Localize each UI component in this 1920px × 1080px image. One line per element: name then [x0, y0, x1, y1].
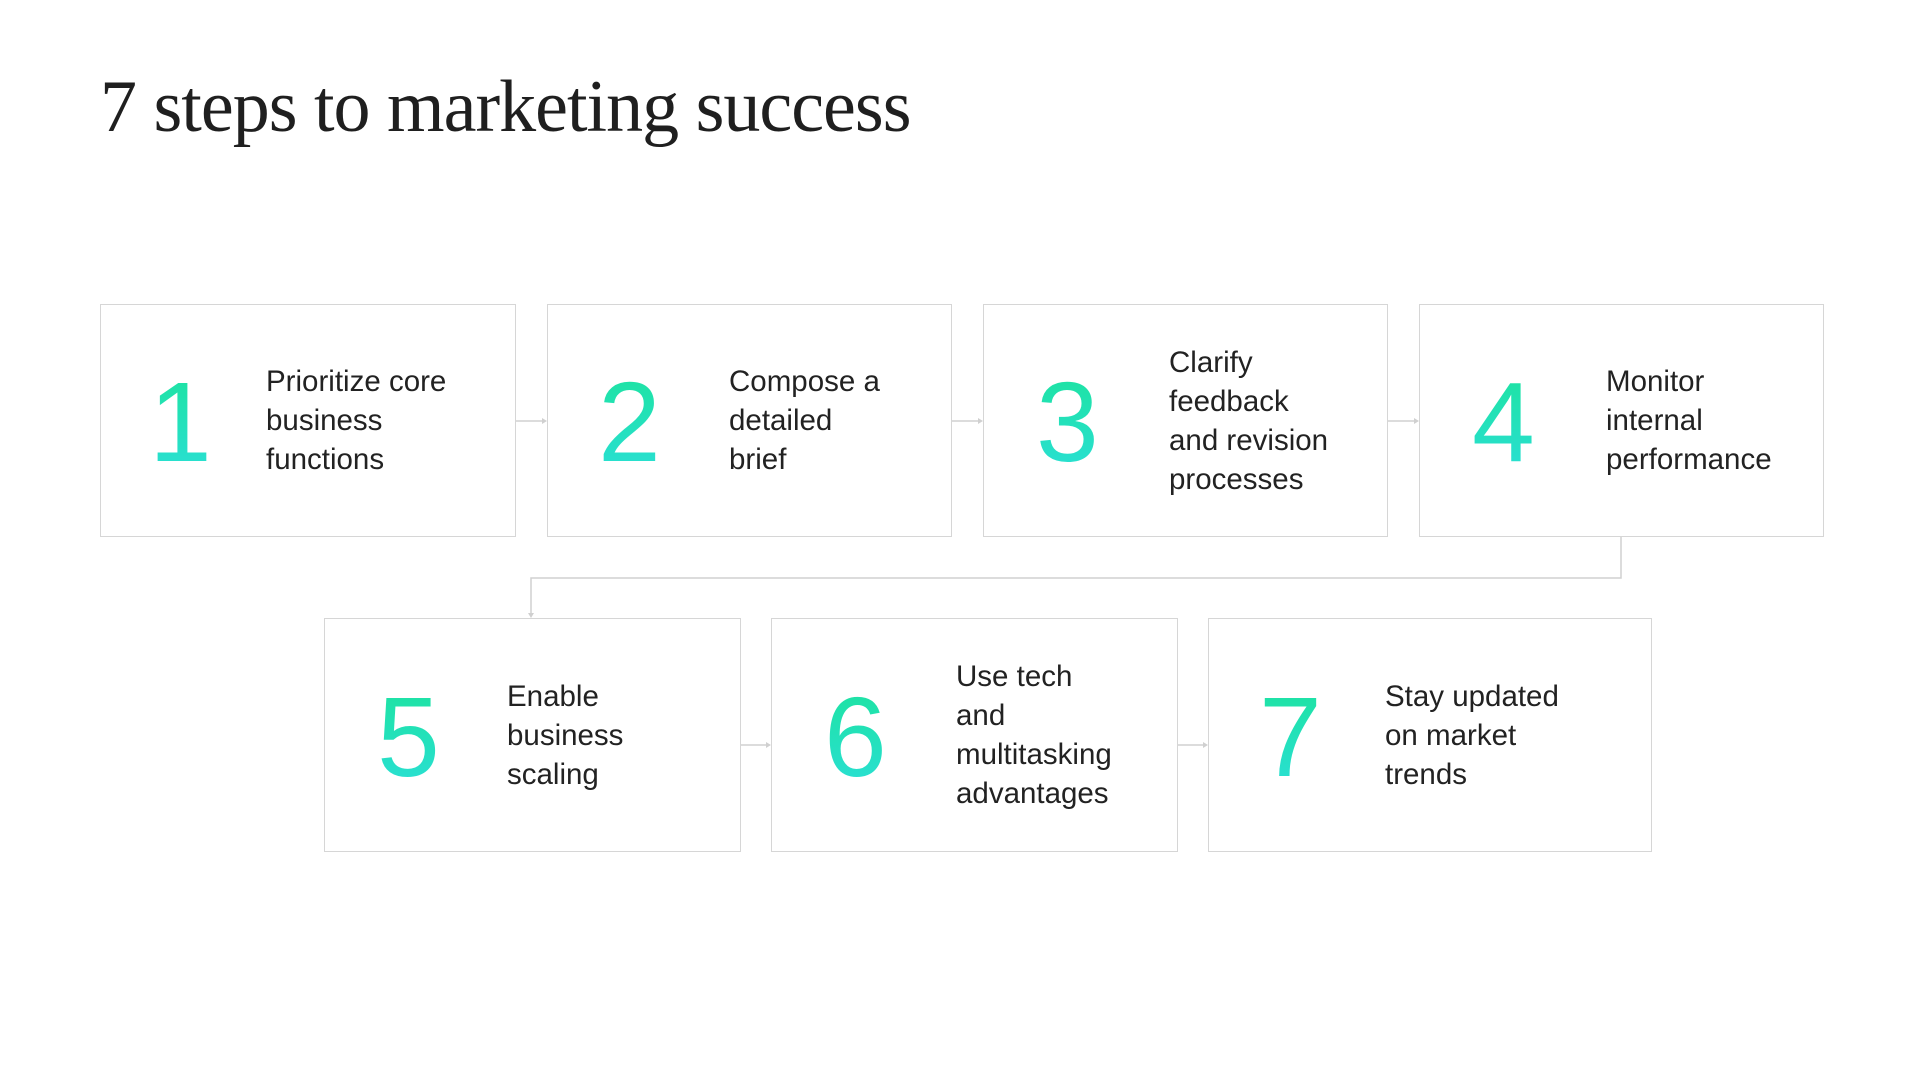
panel: step 3: processes — [1169, 462, 1303, 496]
panel: step 6: and — [956, 699, 1005, 732]
panel: step 1 — [100, 304, 516, 537]
panel: step 4: performance — [1606, 443, 1772, 476]
panel: step 2: Compose a — [729, 365, 880, 398]
panel: step 1: business — [266, 404, 382, 437]
panel: step 1: functions — [266, 443, 384, 476]
panel: step 6: advantages — [956, 777, 1109, 810]
panel: step 4: Monitor — [1606, 365, 1704, 398]
panel: step 7: trends — [1385, 758, 1467, 790]
panel: step 3: and revision — [1169, 424, 1328, 456]
panel: step 4: 4 — [1472, 359, 1535, 485]
panel: step 3: 3 — [1036, 359, 1099, 485]
title: 7 steps to marketing success — [100, 66, 910, 148]
panel: step 2: 2 — [598, 359, 661, 485]
panel: step 5 — [324, 618, 741, 852]
panel: step 4: internal — [1606, 404, 1703, 437]
panel: step 3 — [983, 304, 1388, 537]
panel: step 2 — [547, 304, 952, 537]
panel: step 5: 5 — [377, 674, 440, 800]
panel: step 5: Enable — [507, 680, 599, 712]
panel: step 7: on market — [1385, 718, 1516, 752]
panel: step 7: Stay updated — [1385, 680, 1559, 712]
panel: step 3: Clarify — [1169, 346, 1253, 378]
panel: step 2: brief — [729, 443, 786, 476]
panel: step 5: business — [507, 718, 623, 752]
panel: step 4 — [1419, 304, 1824, 537]
panel: step 5: scaling — [507, 758, 599, 790]
panel: step 1: Prioritize core — [266, 365, 446, 398]
panel: step 6: multitasking — [956, 738, 1112, 771]
panel: step 6 — [771, 618, 1178, 852]
panel: step 1: 1 — [149, 359, 212, 485]
panel: step 6: 6 — [824, 674, 887, 800]
panel: step 2: detailed — [729, 404, 832, 437]
panel: step 7 — [1208, 618, 1652, 852]
panel: step 7: 7 — [1259, 674, 1322, 800]
panel: step 3: feedback — [1169, 384, 1289, 418]
panel: step 6: Use tech — [956, 660, 1072, 693]
